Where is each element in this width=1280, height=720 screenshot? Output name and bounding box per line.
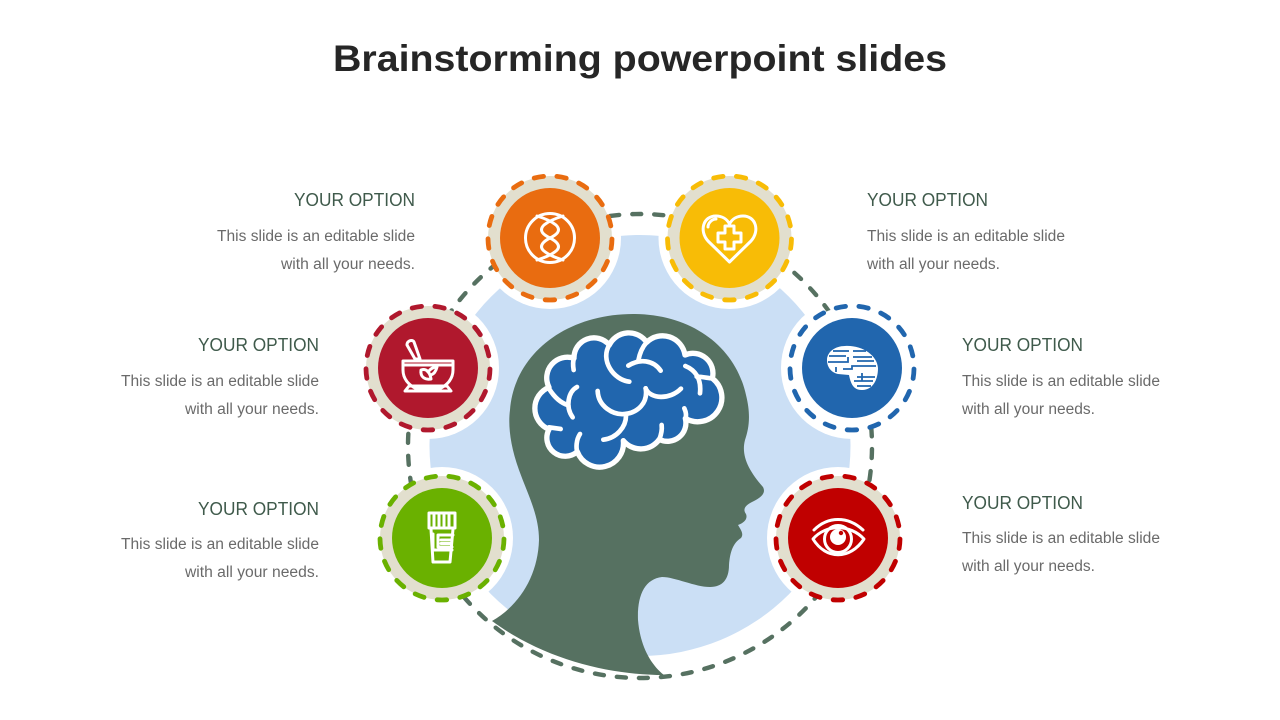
badge: green sample bottle — [380, 476, 504, 600]
text block: bottom right: with all your needs. — [961, 558, 1095, 575]
text block: middle left — [121, 334, 319, 418]
text block: bottom left — [121, 498, 319, 581]
head silhouette — [492, 314, 764, 675]
text block: top right — [866, 189, 1065, 273]
title: Brainstorming powerpoint slides — [333, 38, 947, 79]
text block: top left: YOUR OPTION — [294, 189, 415, 210]
badge: yellow heart — [668, 176, 792, 300]
text block: bottom right: YOUR OPTION — [962, 492, 1083, 513]
text block: top left: This slide is an editable slide — [217, 228, 415, 245]
dashed outer circle — [408, 214, 872, 678]
text block: middle right: with all your needs. — [961, 401, 1095, 418]
text block: bottom left: YOUR OPTION — [198, 498, 319, 519]
badge: crimson mortar and pestle — [366, 306, 490, 430]
text block: middle right: YOUR OPTION — [962, 334, 1083, 355]
text block: bottom left: with all your needs. — [184, 564, 319, 581]
light blue background circle — [430, 235, 850, 656]
text block: top right: with all your needs. — [866, 256, 1000, 273]
white halos around icon badges — [357, 167, 923, 609]
text block: middle right: This slide is an editable slide — [962, 373, 1160, 390]
text block: bottom right — [961, 492, 1160, 575]
text block: top left — [217, 189, 415, 273]
badge: orange DNA — [488, 176, 612, 300]
text block: bottom left: This slide is an editable slide — [121, 536, 319, 553]
text block: top right: YOUR OPTION — [867, 189, 988, 210]
text block: top right: This slide is an editable slide — [867, 228, 1065, 245]
text block: middle right — [961, 334, 1160, 418]
text block: top left: with all your needs. — [280, 256, 415, 273]
text block: middle left: This slide is an editable slide — [121, 373, 319, 390]
badge: red eye — [776, 476, 900, 600]
brain illustration — [535, 333, 722, 467]
text block: bottom right: This slide is an editable slide — [962, 530, 1160, 547]
text block: middle left: YOUR OPTION — [198, 334, 319, 355]
text block: middle left: with all your needs. — [184, 401, 319, 418]
badge: blue brain — [790, 306, 914, 430]
